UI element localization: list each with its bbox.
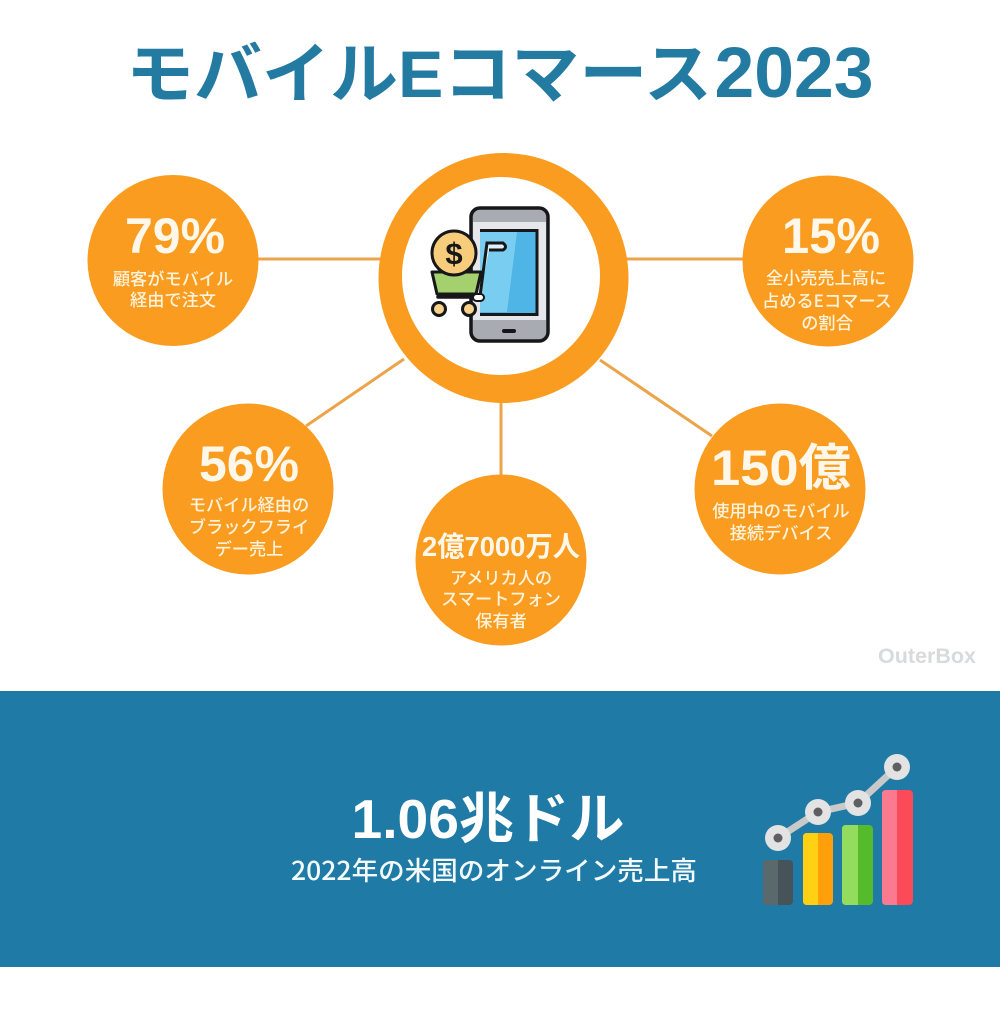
stat circle: 15%: 15% — [782, 208, 880, 264]
stat circle: 79% — [88, 175, 258, 346]
title: 2023 — [714, 34, 874, 113]
connector lines — [256, 259, 746, 478]
stat circle: 79%: 79% — [125, 208, 225, 264]
stat circle: 15% — [742, 176, 914, 346]
stat circle: 150億: 使用中のモバイル — [712, 497, 850, 522]
central ring — [378, 153, 628, 403]
stat circle: 56% — [162, 404, 334, 574]
stat circle: 56%: デー売上 — [215, 535, 283, 560]
stat circle: 2億7000万人: 2億7000万人 — [422, 531, 580, 562]
banner caption: 2022年の米国のオンライン売上高 — [291, 851, 697, 888]
stat circle: 2億7000万人: 保有者 — [475, 607, 527, 632]
stat circle: 2億7000万人: アメリカ人の — [450, 564, 552, 589]
stat circle: 150億: 150億 — [711, 440, 851, 496]
stat circle: 15%: 占めるEコマース — [762, 287, 892, 312]
icon: smartphone — [471, 208, 548, 341]
watermark: OuterBox — [878, 645, 976, 668]
stat circle: 2億7000万人 — [416, 474, 586, 646]
stat circle: 150億: 接続デバイス — [730, 519, 832, 544]
stat circle: 56%: 56% — [199, 436, 299, 492]
stat circle: 79%: 顧客がモバイル — [113, 265, 233, 290]
icon: growth bar chart — [763, 754, 913, 905]
title: モバイルEコマース — [126, 37, 712, 111]
stat circle: 2億7000万人: スマートフォン — [441, 585, 561, 610]
bottom banner — [0, 691, 1000, 967]
stat circle: 79%: 経由で注文 — [130, 286, 216, 311]
stat circle: 56%: ブラックフライ — [189, 513, 309, 538]
stat circle: 56%: モバイル経由の — [189, 491, 309, 516]
icon: shopping cart: $ — [445, 236, 463, 271]
icon: smartphone with shopping cart — [432, 208, 548, 341]
stat circle: 150億 — [694, 404, 866, 574]
banner figure: 1.06兆ドル — [352, 788, 624, 850]
stat circle: 15%: の割合 — [801, 309, 853, 334]
stat circle: 15%: 全小売売上高に — [766, 264, 886, 289]
